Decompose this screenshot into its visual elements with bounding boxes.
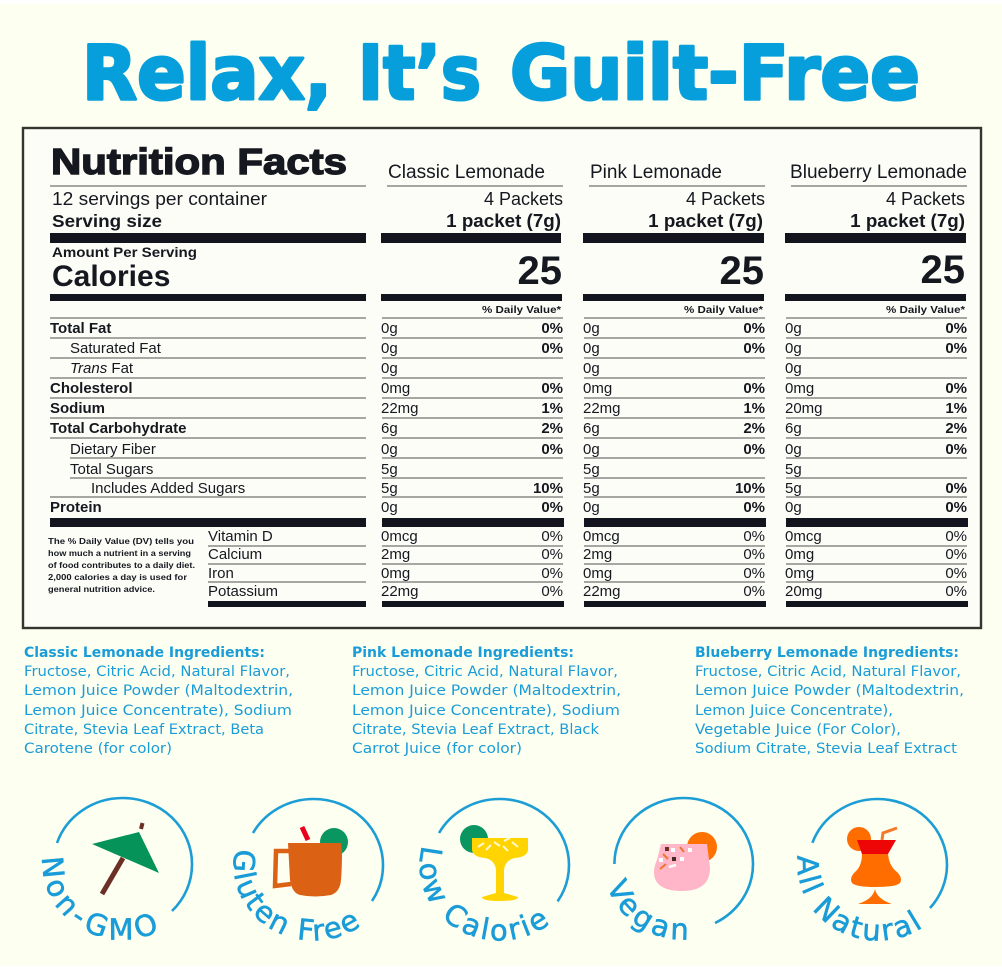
badge: vegan <box>610 796 754 940</box>
daily value footnote: of food contributes to a daily diet. <box>48 560 195 570</box>
classic lemonade ingredients <box>24 645 293 757</box>
classic lemonade ingredients: Citrate, Stevia Leaf Extract, Beta <box>24 722 264 738</box>
blueberry lemonade ingredients <box>695 645 964 757</box>
row: sodium: 1% <box>743 400 765 417</box>
row: dietary fiber: 0g <box>583 441 600 458</box>
row: dietary fiber: 0% <box>743 441 765 458</box>
calories: 25 <box>518 249 562 293</box>
row: dietary fiber: 0% <box>945 441 967 458</box>
row: total carbohydrate: 2% <box>945 420 967 437</box>
row: vitamin d <box>208 528 967 545</box>
row: trans fat: 0g <box>785 360 802 377</box>
row: calcium <box>208 546 967 563</box>
row: total carbohydrate: Total Carbohydrate <box>50 420 186 437</box>
column headers: Pink Lemonade <box>590 162 722 183</box>
title <box>82 29 920 117</box>
row: saturated fat: 0% <box>743 340 765 357</box>
serving size: 1 packet (7g) <box>446 210 561 231</box>
column headers: Classic Lemonade <box>388 162 545 183</box>
row: iron <box>208 565 967 582</box>
row: total sugars: 5g <box>583 461 600 478</box>
title: It’s <box>358 29 481 117</box>
row: total carbohydrate: 2% <box>541 420 563 437</box>
icon: pink drink <box>654 832 717 891</box>
row: added sugars: 5g <box>583 480 600 497</box>
row: trans fat <box>70 360 802 377</box>
title: Guilt-Free <box>510 29 920 117</box>
classic lemonade ingredients: Lemon Juice Powder (Maltodextrin, <box>24 683 293 699</box>
row: total sugars: 5g <box>381 461 398 478</box>
row: total fat: 0% <box>743 320 765 337</box>
classic lemonade ingredients: Fructose, Citric Acid, Natural Flavor, <box>24 664 290 680</box>
row: sodium: 1% <box>541 400 563 417</box>
serving size <box>52 210 965 231</box>
row: potassium: 0% <box>743 583 765 600</box>
row: dietary fiber: 0g <box>381 441 398 458</box>
row: iron: 0mg <box>381 565 410 582</box>
row: total fat: Total Fat <box>50 320 111 337</box>
classic lemonade ingredients: Carotene (for color) <box>24 741 172 757</box>
row: calcium: Calcium <box>208 546 262 563</box>
row: vitamin d: 0% <box>541 528 563 545</box>
label: all natural: All Natural <box>797 855 922 941</box>
icon: margarita glass <box>460 825 528 901</box>
row: dietary fiber: 0g <box>785 441 802 458</box>
row: calcium: 2mg <box>583 546 612 563</box>
row: iron: 0mg <box>785 565 814 582</box>
row: potassium: 22mg <box>381 583 419 600</box>
row: sodium: 20mg <box>785 400 823 417</box>
row: total carbohydrate: 6g <box>583 420 600 437</box>
row: potassium: Potassium <box>208 583 278 600</box>
pink lemonade ingredients <box>352 645 621 757</box>
pink lemonade ingredients: Lemon Juice Concentrate), Sodium <box>352 703 620 719</box>
row: protein: 0g <box>381 499 398 516</box>
badge: all natural <box>797 798 948 941</box>
label: vegan: Vegan <box>610 876 687 940</box>
row: dietary fiber: 0% <box>541 441 563 458</box>
column headers: Blueberry Lemonade <box>790 162 967 183</box>
row: vitamin d: 0% <box>743 528 765 545</box>
row: iron: 0% <box>541 565 563 582</box>
row: total fat: 0g <box>785 320 802 337</box>
label: non-gmo: Non-GMO <box>42 858 156 940</box>
row: vitamin d: 0mcg <box>381 528 418 545</box>
row: cholesterol <box>50 380 967 397</box>
row: total fat: 0% <box>945 320 967 337</box>
icon: copper mug <box>275 827 348 896</box>
row: trans fat: Trans Fat <box>70 360 134 377</box>
row: added sugars: 10% <box>533 480 563 497</box>
row: calcium: 0% <box>743 546 765 563</box>
row: sodium: 22mg <box>583 400 621 417</box>
row: protein: 0g <box>583 499 600 516</box>
row: protein: Protein <box>50 499 102 516</box>
row: iron: 0mg <box>583 565 612 582</box>
icon: orange cocktail <box>847 827 901 904</box>
row: added sugars: 0% <box>945 480 967 497</box>
row: dietary fiber: Dietary Fiber <box>70 441 156 458</box>
daily value footnote: how much a nutrient in a serving <box>48 548 191 558</box>
row: saturated fat: 0g <box>381 340 398 357</box>
row: cholesterol: 0mg <box>785 380 814 397</box>
row: potassium: 0% <box>541 583 563 600</box>
row: added sugars: Includes Added Sugars <box>91 480 245 497</box>
pink lemonade ingredients: Citrate, Stevia Leaf Extract, Black <box>352 722 600 738</box>
calories: Calories <box>52 260 170 293</box>
calories: 25 <box>920 248 965 292</box>
row: total carbohydrate: 6g <box>785 420 802 437</box>
row: potassium: 0% <box>945 583 967 600</box>
row: total sugars <box>70 461 802 478</box>
row: added sugars: 10% <box>735 480 765 497</box>
amount per serving: Amount Per Serving <box>52 244 197 260</box>
row: saturated fat <box>70 340 967 357</box>
blueberry lemonade ingredients: Sodium Citrate, Stevia Leaf Extract <box>695 741 958 757</box>
row: sodium: 22mg <box>381 400 419 417</box>
row: cholesterol: Cholesterol <box>50 380 133 397</box>
row: saturated fat: 0% <box>541 340 563 357</box>
row: total fat: 0% <box>541 320 563 337</box>
percent daily value headers <box>482 304 966 316</box>
row: calcium: 2mg <box>381 546 410 563</box>
row: vitamin d: 0mcg <box>583 528 620 545</box>
row: saturated fat: 0g <box>583 340 600 357</box>
percent daily value headers: % Daily Value* <box>482 304 562 316</box>
row: sodium <box>50 400 967 417</box>
row: protein: 0% <box>541 499 563 516</box>
row: trans fat: 0g <box>381 360 398 377</box>
calories: 25 <box>720 249 764 293</box>
row: saturated fat: 0g <box>785 340 802 357</box>
blueberry lemonade ingredients: Blueberry Lemonade Ingredients: <box>695 645 959 661</box>
row: total carbohydrate: 6g <box>381 420 398 437</box>
row: calcium: 0% <box>945 546 967 563</box>
row: iron: 0% <box>743 565 765 582</box>
daily value footnote: 2,000 calories a day is used for <box>48 572 188 582</box>
row: total fat: 0g <box>583 320 600 337</box>
panel: nutrition facts <box>23 128 981 628</box>
row: saturated fat: 0% <box>945 340 967 357</box>
row: vitamin d: 0mcg <box>785 528 822 545</box>
row: saturated fat: Saturated Fat <box>70 340 162 357</box>
row: cholesterol: 0% <box>945 380 967 397</box>
row: total carbohydrate: 2% <box>743 420 765 437</box>
percent daily value headers: % Daily Value* <box>684 304 764 316</box>
pink lemonade ingredients: Fructose, Citric Acid, Natural Flavor, <box>352 664 618 680</box>
serving size: 1 packet (7g) <box>648 210 763 231</box>
row: dietary fiber <box>70 441 967 458</box>
row: total sugars: Total Sugars <box>70 461 153 478</box>
classic lemonade ingredients: Classic Lemonade Ingredients: <box>24 645 265 661</box>
row: total carbohydrate <box>50 420 967 437</box>
row: total fat: 0g <box>381 320 398 337</box>
column headers <box>388 162 967 183</box>
calories <box>52 248 965 293</box>
row: cholesterol: 0mg <box>583 380 612 397</box>
row: cholesterol: 0mg <box>381 380 410 397</box>
row: cholesterol: 0% <box>541 380 563 397</box>
row: protein <box>50 499 967 516</box>
blueberry lemonade ingredients: Vegetable Juice (For Color), <box>695 722 901 738</box>
servings per container: 4 Packets <box>686 189 765 209</box>
row: iron: Iron <box>208 565 234 582</box>
blueberry lemonade ingredients: Lemon Juice Powder (Maltodextrin, <box>695 683 964 699</box>
blueberry lemonade ingredients: Lemon Juice Concentrate), <box>695 703 893 719</box>
servings per container: 4 Packets <box>484 189 563 209</box>
row: potassium: 20mg <box>785 583 823 600</box>
serving size: Serving size <box>52 211 162 231</box>
row: protein: 0% <box>945 499 967 516</box>
row: vitamin d: Vitamin D <box>208 528 273 545</box>
serving size: 1 packet (7g) <box>850 210 965 231</box>
badge: non-gmo <box>42 796 194 940</box>
pink lemonade ingredients: Carrot Juice (for color) <box>352 741 522 757</box>
row: vitamin d: 0% <box>945 528 967 545</box>
row: total fat <box>50 320 967 337</box>
row: added sugars <box>91 480 967 497</box>
row: calcium: 0% <box>541 546 563 563</box>
row: added sugars: 5g <box>785 480 802 497</box>
pink lemonade ingredients: Lemon Juice Powder (Maltodextrin, <box>352 683 621 699</box>
label: gluten free: Gluten Free <box>233 851 360 941</box>
label: low calorie: Low Calorie <box>419 848 548 942</box>
row: cholesterol: 0% <box>743 380 765 397</box>
row: calcium: 0mg <box>785 546 814 563</box>
percent daily value headers: % Daily Value* <box>886 304 966 316</box>
servings per container <box>52 189 965 209</box>
title: Relax, <box>82 29 332 117</box>
blueberry lemonade ingredients: Fructose, Citric Acid, Natural Flavor, <box>695 664 961 680</box>
daily value footnote <box>48 536 195 594</box>
nutrition facts heading: Nutrition Facts <box>51 141 347 182</box>
row: trans fat: 0g <box>583 360 600 377</box>
classic lemonade ingredients: Lemon Juice Concentrate), Sodium <box>24 703 292 719</box>
row: total sugars: 5g <box>785 461 802 478</box>
servings per container: 4 Packets <box>886 189 965 209</box>
icon: green umbrella <box>92 823 159 894</box>
row: sodium: Sodium <box>50 400 105 417</box>
row: added sugars: 5g <box>381 480 398 497</box>
badge: low calorie <box>419 798 570 942</box>
row: protein: 0g <box>785 499 802 516</box>
row: protein: 0% <box>743 499 765 516</box>
row: iron: 0% <box>945 565 967 582</box>
row: potassium: 22mg <box>583 583 621 600</box>
pink lemonade ingredients: Pink Lemonade Ingredients: <box>352 645 574 661</box>
servings per container: 12 servings per container <box>52 189 267 209</box>
badge: gluten free <box>233 798 384 941</box>
daily value footnote: The % Daily Value (DV) tells you <box>48 536 194 546</box>
daily value footnote: general nutrition advice. <box>48 584 155 594</box>
row: sodium: 1% <box>945 400 967 417</box>
row: potassium <box>208 583 967 600</box>
